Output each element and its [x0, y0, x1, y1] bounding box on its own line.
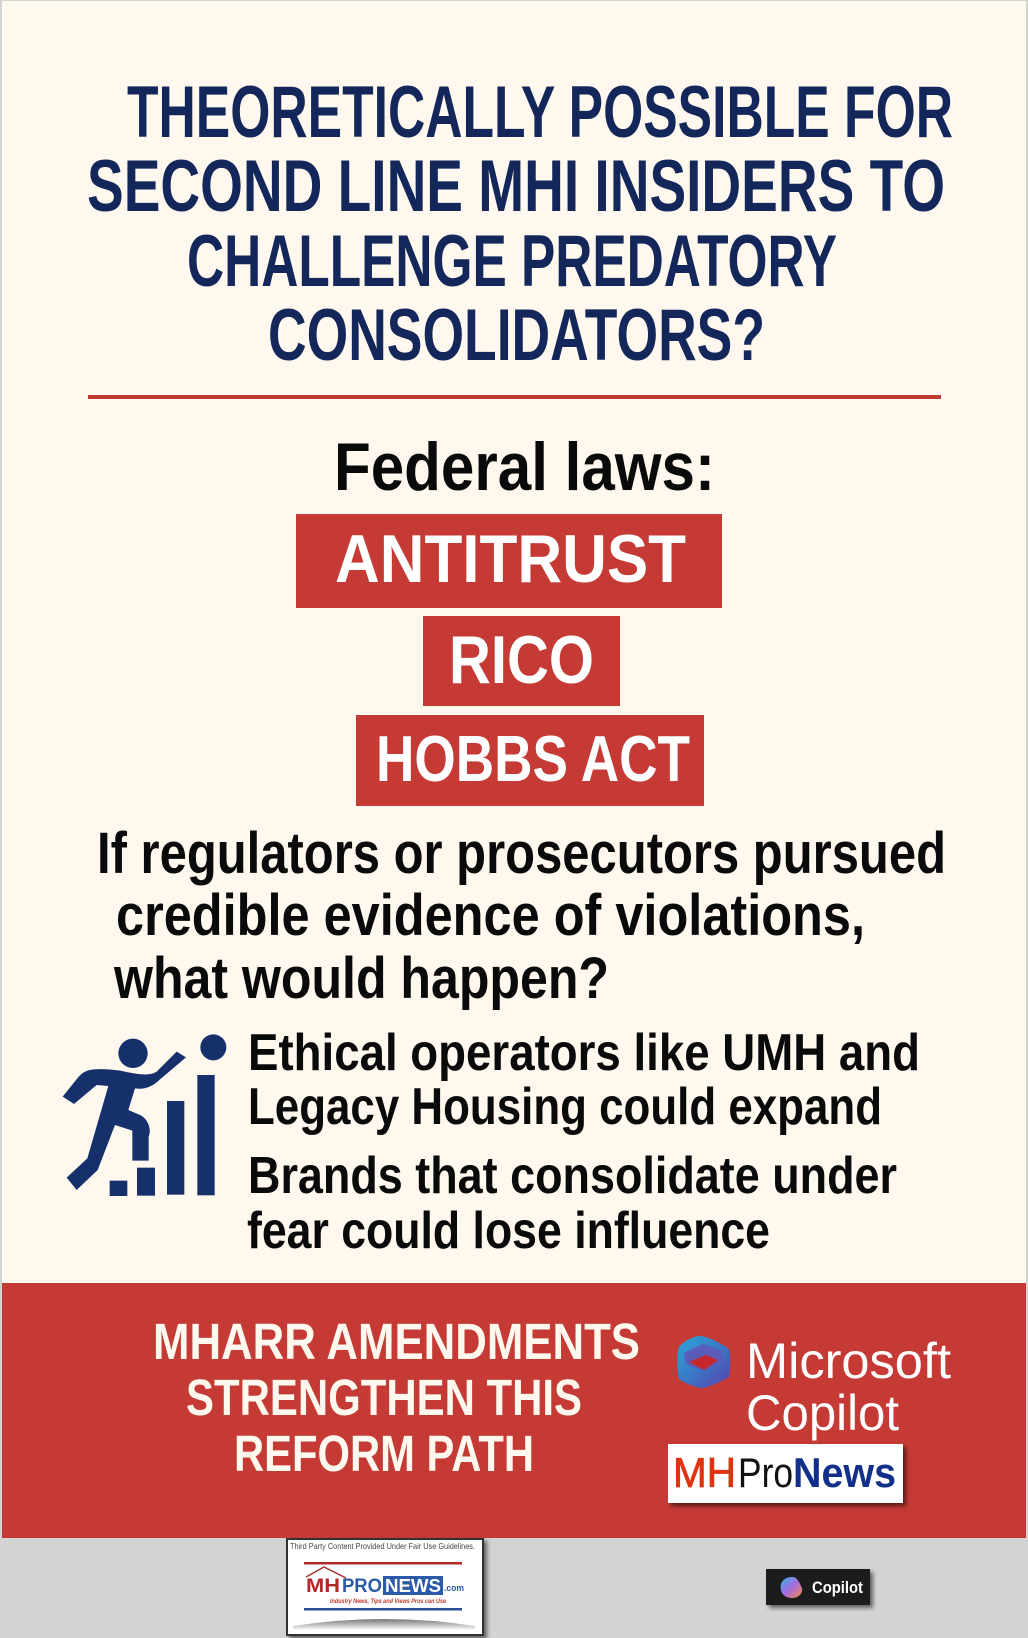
- question text: credible evidence of violations,: [116, 883, 865, 948]
- label: antitrust: ANTITRUST: [335, 521, 686, 597]
- footer message: MHARR AMENDMENTS: [153, 1313, 640, 1370]
- logo: mhpronews fair use card: Third Party Content Provided Under Fair Use Guidelines.: [290, 1541, 475, 1551]
- footer message: STRENGTHEN THIS: [186, 1369, 582, 1426]
- logo: mhpronews fair use card: NEWS: [385, 1576, 441, 1596]
- logo: mhpronews fair use card: [287, 1539, 483, 1635]
- logo text: microsoft copilot: Copilot: [746, 1385, 899, 1441]
- outcome: ethical operators: [248, 1024, 920, 1136]
- icon: figure climbing bar chart: [63, 1034, 226, 1196]
- question text: what would happen?: [113, 946, 609, 1011]
- badge: copilot: Copilot: [812, 1578, 863, 1597]
- outcome: ethical operators: Legacy Housing could expand: [248, 1078, 882, 1136]
- label: hobbs act: [356, 715, 704, 806]
- outcome: ethical operators: Ethical operators like UMH and: [248, 1024, 920, 1082]
- heading: federal laws: Federal laws:: [334, 429, 715, 505]
- outcome: brands: Brands that consolidate under: [248, 1147, 897, 1205]
- logo: mhpronews white box: Pro: [738, 1449, 793, 1496]
- footer message: REFORM PATH: [234, 1425, 534, 1482]
- logo: mhpronews fair use card: MH: [306, 1576, 340, 1597]
- icon: microsoft copilot cube: [677, 1336, 730, 1388]
- outcome: brands: [247, 1147, 897, 1260]
- title: [87, 72, 953, 376]
- logo: mhpronews fair use card: PRO: [342, 1576, 382, 1597]
- red footer band: [2, 1283, 1026, 1538]
- cream background panel: [2, 1, 1026, 1284]
- logo: mhpronews white box: [668, 1444, 903, 1503]
- badge: copilot: [766, 1569, 870, 1605]
- outcome: brands: fear could lose influence: [247, 1202, 770, 1260]
- question text: [97, 821, 946, 1011]
- logo text: microsoft copilot: Microsoft: [746, 1333, 951, 1389]
- title: CONSOLIDATORS?: [268, 295, 765, 376]
- logo: mhpronews fair use card: Industry News, Tips and Views Pros can Use: [330, 1598, 446, 1605]
- logo: mhpronews fair use card: .com: [444, 1583, 464, 1593]
- footer message: [153, 1313, 640, 1482]
- logo text: microsoft copilot: [746, 1333, 951, 1441]
- label: rico: RICO: [449, 622, 594, 698]
- logo: mhpronews white box: MH: [673, 1449, 736, 1496]
- label: hobbs act: HOBBS ACT: [376, 722, 690, 795]
- logo: mhpronews white box: News: [793, 1449, 896, 1496]
